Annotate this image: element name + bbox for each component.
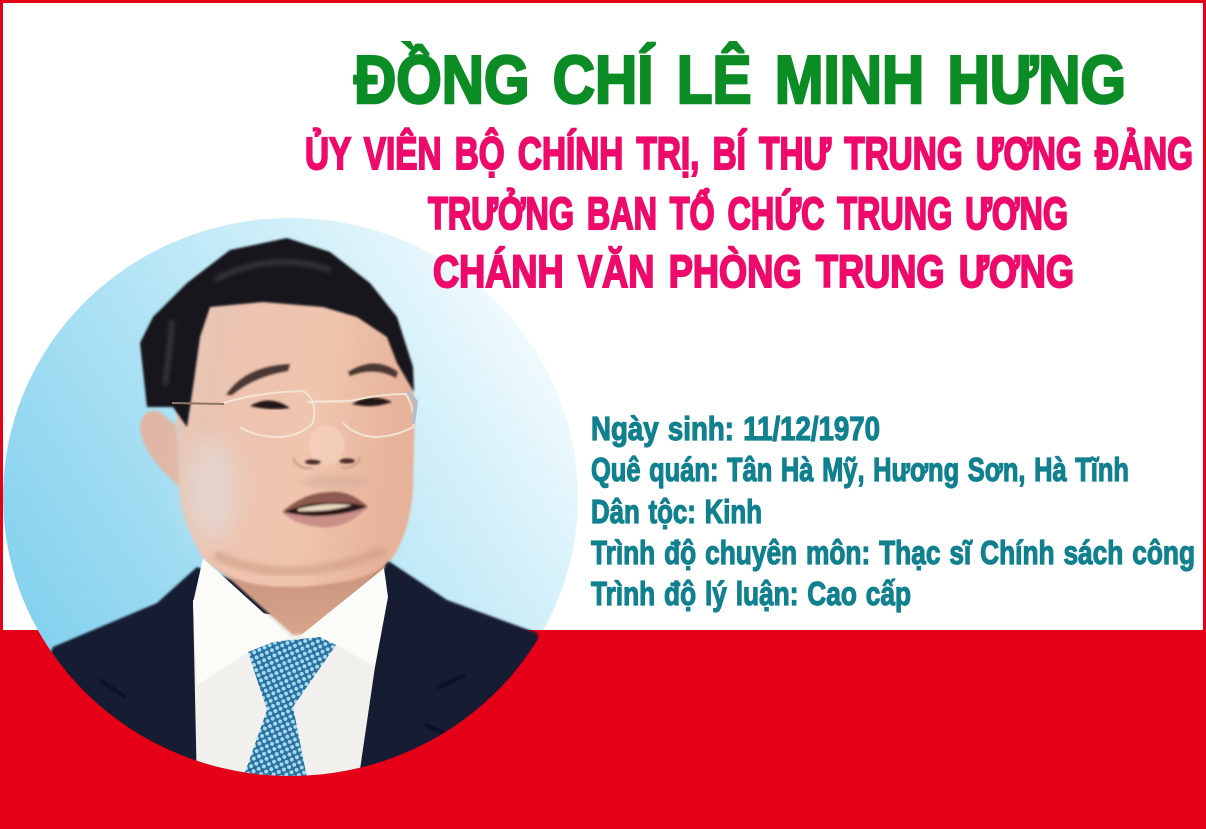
political theory level: Trình độ lý luận: Cao cấp (591, 575, 911, 612)
red bottom band (0, 630, 1206, 829)
hair (140, 238, 414, 427)
right collar (300, 568, 388, 667)
nose (293, 425, 360, 468)
biography details (591, 410, 1195, 612)
subtitle lines (305, 128, 1193, 297)
shirt (193, 600, 376, 776)
glasses (172, 391, 416, 437)
neck (218, 564, 386, 636)
eyebrows (226, 364, 398, 395)
left collar (193, 558, 290, 685)
upper lip shadow (303, 476, 366, 488)
lapel shadows (100, 675, 465, 735)
suit jacket (50, 560, 540, 776)
cheek highlight (186, 438, 238, 542)
ethnicity: Dân tộc: Kinh (591, 493, 762, 530)
face (175, 285, 415, 587)
mouth (282, 492, 368, 527)
necktie (243, 637, 336, 778)
circular portrait (3, 218, 578, 776)
hair highlights (165, 262, 330, 385)
portrait background (0, 200, 600, 665)
jaw shading (215, 550, 385, 571)
eyes (250, 397, 392, 409)
birth date: Ngày sinh: 11/12/1970 (591, 410, 880, 447)
ear (140, 411, 184, 492)
